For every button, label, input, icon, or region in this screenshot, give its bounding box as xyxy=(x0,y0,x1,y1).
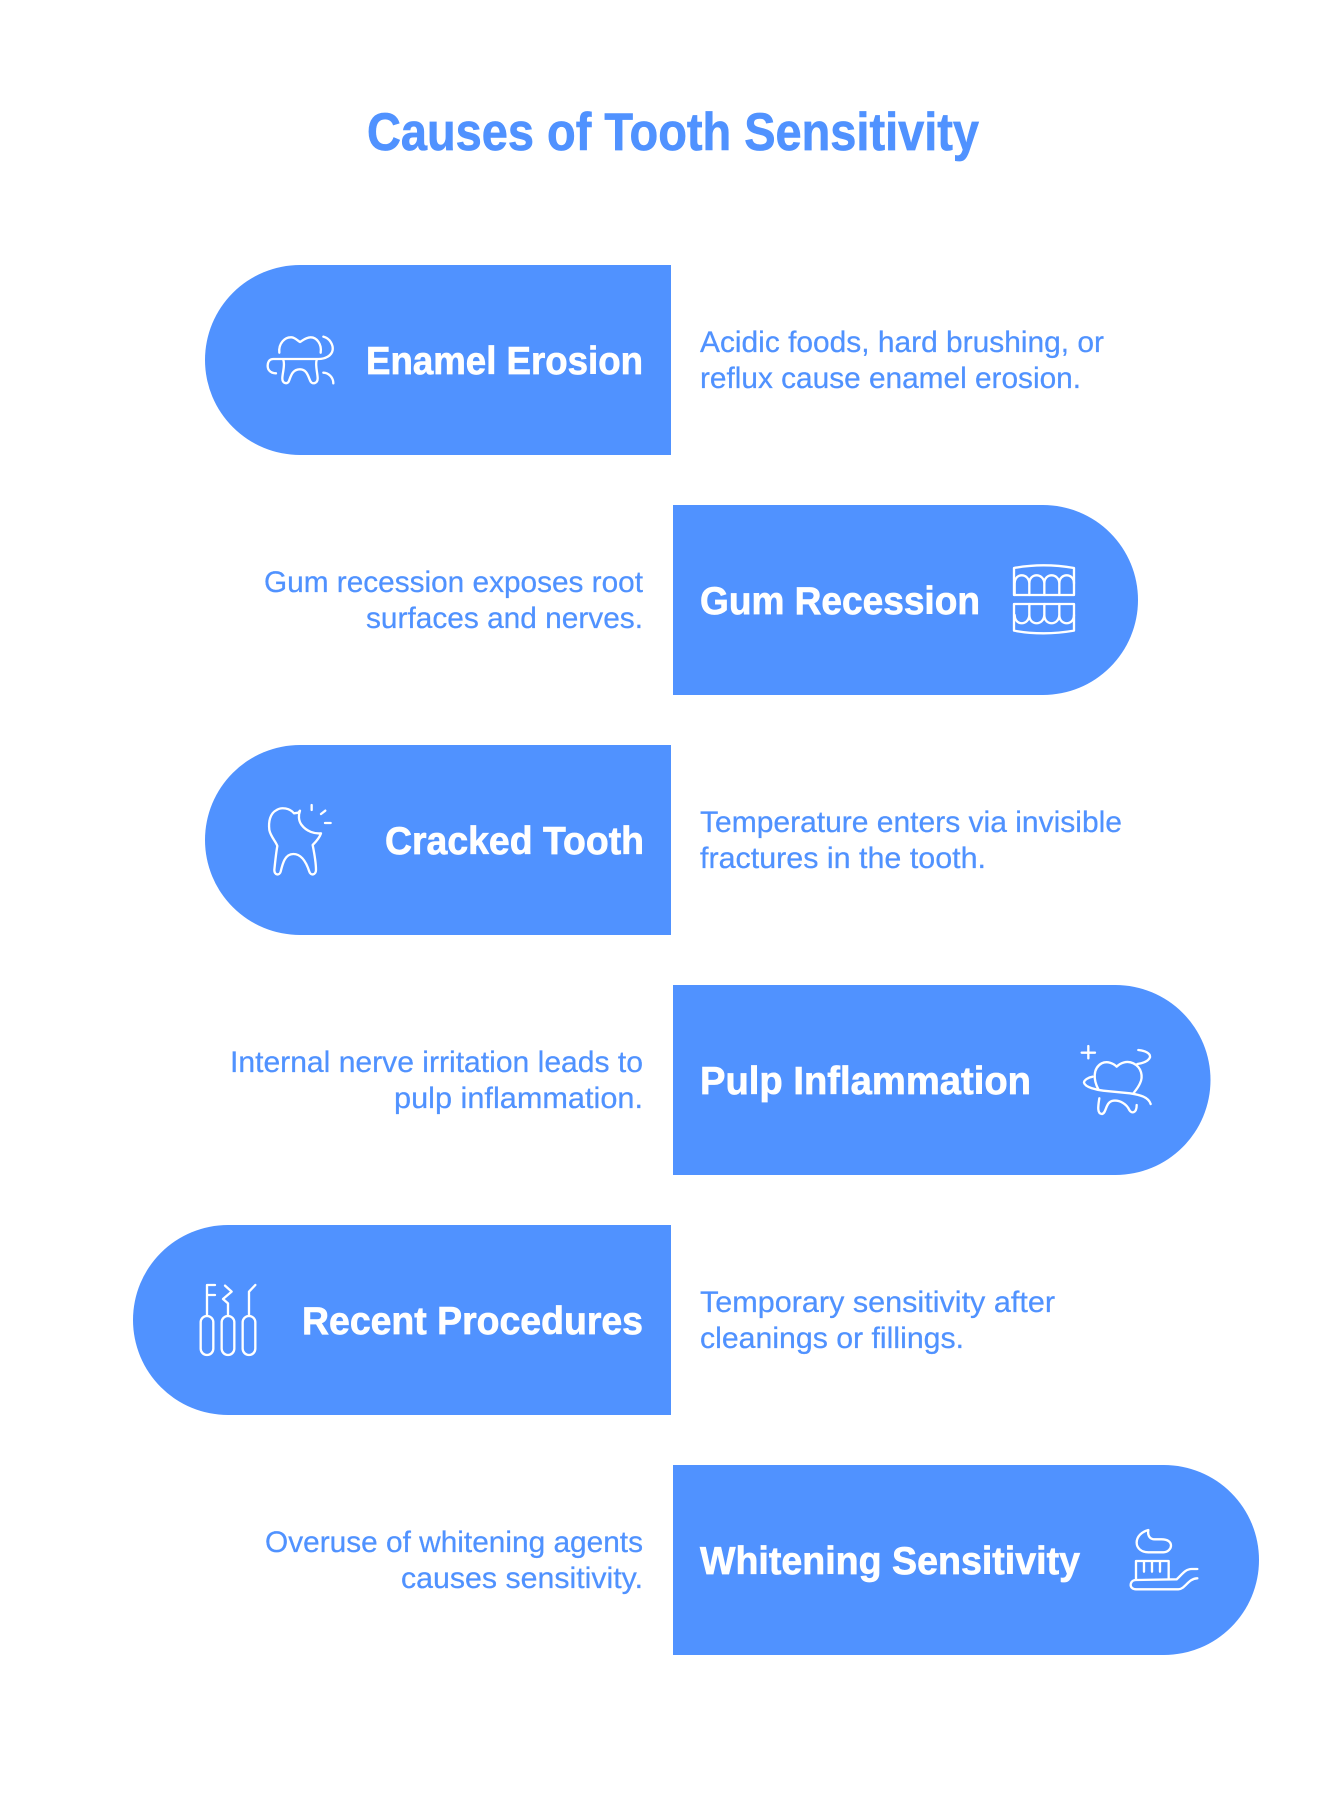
description: gum recession: Gum recession exposes root xyxy=(264,566,643,599)
panel: gum recession xyxy=(264,505,1138,695)
description: recent procedures: Temporary sensitivity after xyxy=(700,1286,1055,1319)
description: whitening sensitivity: causes sensitivity. xyxy=(401,1562,643,1595)
label: whitening sensitivity: Whitening Sensitivity xyxy=(700,1540,1080,1583)
pill: cracked tooth xyxy=(205,745,671,935)
pill: recent procedures xyxy=(133,1225,671,1415)
label: pulp inflammation: Pulp Inflammation xyxy=(700,1060,1031,1103)
label: recent procedures: Recent Procedures xyxy=(302,1300,643,1343)
label: cracked tooth: Cracked Tooth xyxy=(385,820,644,863)
description: pulp inflammation: pulp inflammation. xyxy=(394,1082,643,1115)
icon: cracked tooth xyxy=(269,805,331,874)
description: enamel erosion: reflux cause enamel erosion. xyxy=(700,362,1081,395)
description: pulp inflammation: Internal nerve irritation leads to xyxy=(230,1046,643,1079)
pill: pulp inflammation xyxy=(673,985,1210,1175)
description: gum recession: surfaces and nerves. xyxy=(366,602,643,635)
description: cracked tooth: fractures in the tooth. xyxy=(700,842,986,875)
description: enamel erosion: Acidic foods, hard brushing, or xyxy=(700,326,1104,359)
panel: cracked tooth xyxy=(205,745,1122,935)
icon: dental tools xyxy=(201,1285,255,1355)
title: Causes of Tooth Sensitivity xyxy=(367,103,979,162)
description: cracked tooth: Temperature enters via invisible xyxy=(700,806,1122,839)
label: gum recession: Gum Recession xyxy=(700,580,980,623)
description: whitening sensitivity: Overuse of whitening agents xyxy=(265,1526,643,1559)
icon: teeth rows xyxy=(1014,565,1074,633)
icon: inflamed tooth xyxy=(1082,1046,1151,1114)
icon: toothbrush with paste xyxy=(1131,1530,1197,1589)
icon: tooth with floss xyxy=(268,337,333,383)
pill: whitening sensitivity xyxy=(673,1465,1259,1655)
pill: enamel erosion xyxy=(205,265,671,455)
description: recent procedures: cleanings or fillings. xyxy=(700,1322,964,1355)
panel: enamel erosion xyxy=(205,265,1104,455)
panel: pulp inflammation xyxy=(230,985,1210,1175)
pill: gum recession xyxy=(673,505,1138,695)
panel: whitening sensitivity xyxy=(265,1465,1259,1655)
label: enamel erosion: Enamel Erosion xyxy=(366,340,643,383)
panel: recent procedures xyxy=(133,1225,1055,1415)
